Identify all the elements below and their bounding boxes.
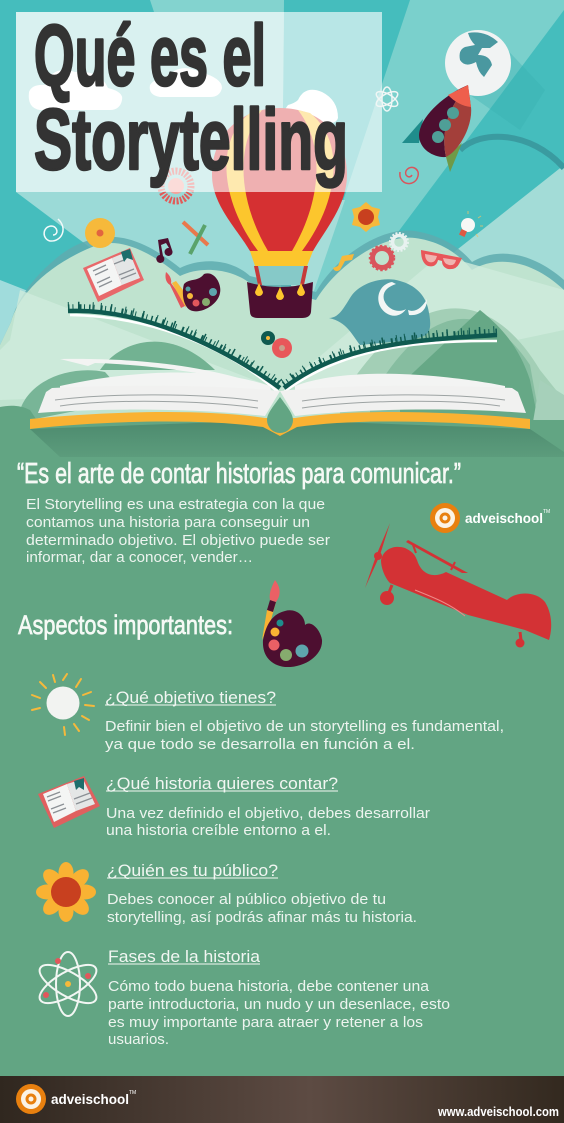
icon: light bulb [459,211,483,237]
intro paragraph: informar, dar a conocer, vender… [26,549,253,566]
open book [30,359,530,436]
item 3: publico: ¿Quién es tu público? [107,861,278,880]
right page [284,341,497,392]
icon: music note dark [156,238,173,263]
icon: sunflower [36,862,96,922]
intro paragraph [26,496,330,566]
pale green cloud layer [0,238,564,440]
background arc [460,137,564,168]
item 2: historia: Una vez definido el objetivo, debes desarrollar [106,805,430,822]
icon: orange sun flower [352,202,380,232]
item 2: historia [38,774,430,839]
background sky with rays [0,0,564,460]
icon: pencils [183,222,208,254]
logo: adveischool [430,503,550,533]
item 1: objetivo: ya que todo se desarrolla en función a el. [105,736,415,753]
right grass [284,331,497,388]
item 4: fases [34,947,450,1048]
book shadow [30,420,564,457]
item 4: fases: Cómo todo buena historia, debe contener una [108,978,430,995]
icon: yellow flower [85,218,115,248]
icon: small flowers [261,331,292,358]
title: Qué es el [34,8,266,104]
logo: footer [16,1084,136,1114]
item 3: publico: storytelling, así podrás afinar más tu historia. [107,909,417,926]
aspects heading: Aspectos importantes: [18,610,233,640]
item 4: fases: Fases de la historia [108,947,261,966]
logo: footer: TM [129,1090,136,1096]
item 1: objetivo: Definir bien el objetivo de un storytelling es fundamental, [105,718,504,735]
item 1: objetivo [32,674,504,753]
icon: small atom [374,87,400,111]
item 3: publico: Debes conocer al público objetivo de tu [107,891,386,908]
lower hills [0,308,564,440]
icon: red gear [370,246,394,270]
icon: atom [34,952,102,1016]
icon: white gear [390,233,408,251]
globe shadow [470,42,545,130]
title: Storytelling [34,92,348,188]
icon: white swirl [44,219,63,241]
icon: rocket [402,85,471,172]
item 4: fases: es muy importante para atraer y retener a los [108,1014,423,1031]
title panel [16,12,382,192]
icon: large palette and brush [262,580,322,667]
green base [0,420,564,1080]
intro paragraph: determinado objetivo. El objetivo puede ser [26,532,330,549]
icon: red swirl [400,167,418,184]
intro paragraph: contamos una historia para conseguir un [26,514,310,531]
item 1: objetivo: ¿Qué objetivo tienes? [105,688,276,707]
icon: sun [32,674,94,735]
item 2: historia: una historia creíble entorno a el. [106,822,331,839]
item 2: historia: ¿Qué historia quieres contar? [106,774,338,793]
icon: open book [83,248,144,302]
logo: adveischool: adveischool [465,510,543,526]
logo: adveischool: TM [543,509,550,515]
cloud outline arcs [0,230,564,420]
item 4: fases: parte introductoria, un nudo y un desenlace, esto [108,996,450,1013]
icon: book [38,776,100,828]
hot air balloon [212,108,347,318]
icon: elephant [329,279,430,345]
white clouds [29,68,338,123]
footer [0,1076,564,1123]
title [34,8,348,188]
item 4: fases: usuarios. [108,1031,169,1048]
icon: globe [445,30,511,96]
cloud light rays [0,255,564,400]
decorative flower pink [161,171,191,201]
item 3: publico [36,861,417,926]
icon: yellow note [333,254,354,271]
icon: red plane [365,523,551,648]
icon: small palette and brush [165,272,220,311]
icon: glasses [421,250,462,269]
logo: footer: adveischool [51,1091,129,1107]
intro paragraph: El Storytelling es una estrategia con la que [26,496,325,513]
left page with grass [68,307,280,392]
